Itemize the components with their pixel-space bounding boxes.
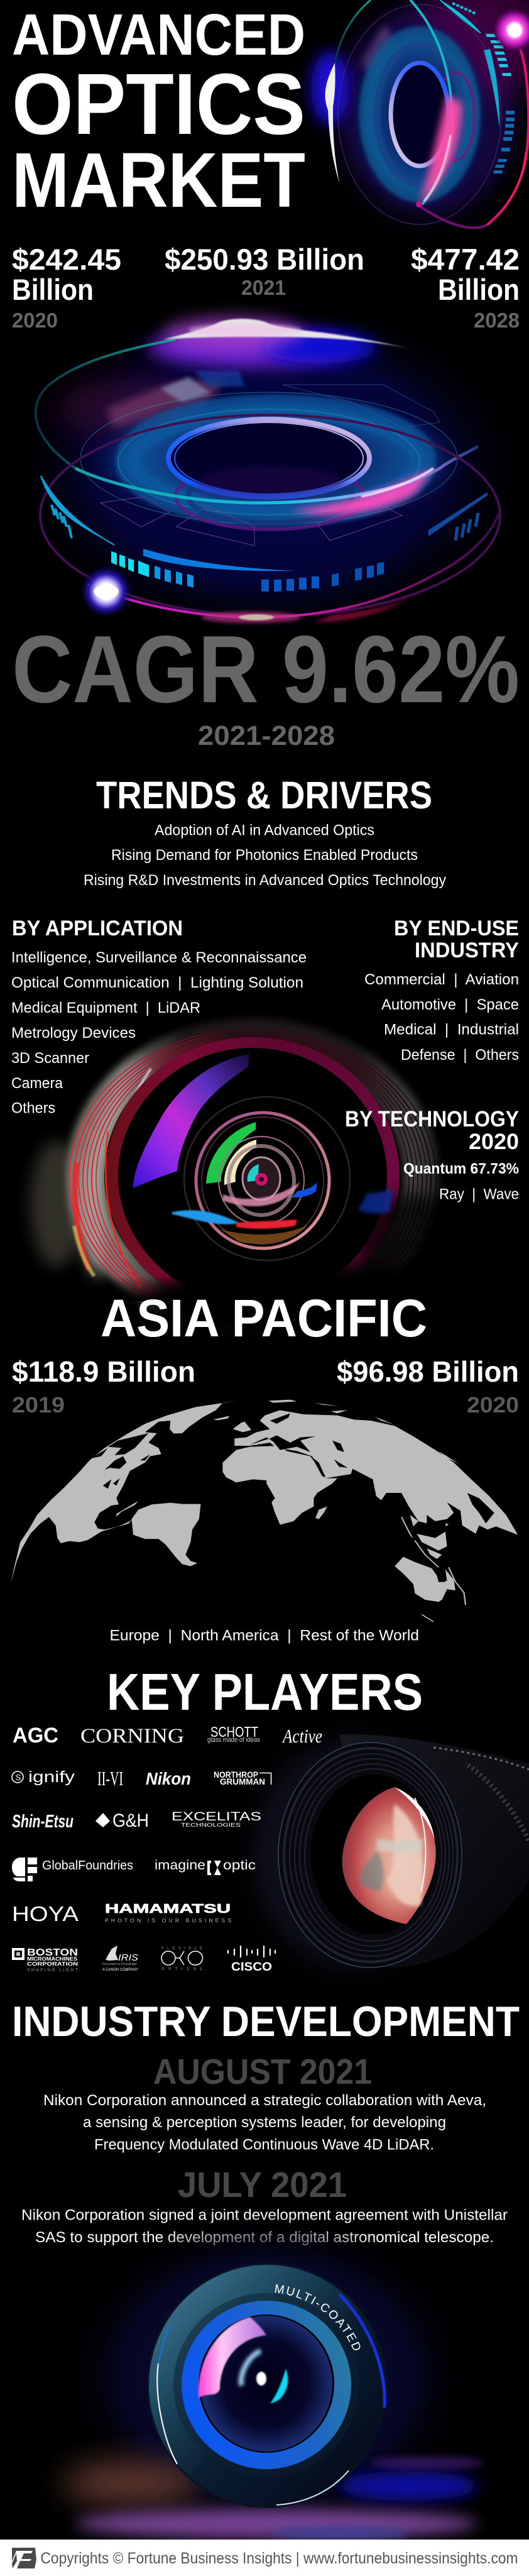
logo: Northrop Grumman <box>214 1770 271 1786</box>
asia pacific 2020 value: 2020 <box>467 1393 519 1417</box>
trends list: Rising Demand for Photonics Enabled Products <box>111 847 418 864</box>
title: ADVANCED <box>12 2 305 67</box>
panel: by end-use industry: Commercial | Aviation <box>364 971 519 988</box>
logo: Flexible OKO Optical: OPTICAL <box>161 1968 203 1971</box>
logo: IRIS: IRIS <box>118 1952 138 1963</box>
other regions: Europe | North America | Rest of the World <box>109 1627 419 1644</box>
logo: II-VI: II-VI <box>97 1767 123 1790</box>
trends list: Adoption of AI in Advanced Optics <box>155 822 374 839</box>
logo: Schott: SCHOTT <box>210 1724 258 1740</box>
logo: Excelitas: TECHNOLOGIES <box>181 1822 241 1828</box>
panel: by end-use industry <box>364 916 519 1064</box>
logo: Hoya: HOYA <box>12 1902 79 1925</box>
forecast period: 2021-2028 <box>198 720 335 751</box>
logo: Imagine Optic <box>155 1858 256 1875</box>
market size 2028: $477.42 <box>411 243 520 276</box>
logo: G&H <box>95 1810 149 1831</box>
logo: Signify: ignify <box>28 1768 75 1786</box>
icon: Fortune Business Insights logo <box>12 2548 36 2568</box>
market size 2020: $242.45 <box>12 243 121 276</box>
panel: by end-use industry: Automotive | Space <box>381 996 519 1013</box>
title: MARKET <box>12 138 305 224</box>
title: OPTICS <box>12 56 305 153</box>
logo: GlobalFoundries: GlobalFoundries <box>42 1859 133 1873</box>
logo: GlobalFoundries <box>12 1858 133 1881</box>
market size 2028 <box>411 243 520 332</box>
panel: by technology: Quantum 67.73% <box>403 1160 519 1177</box>
camera lens photograph <box>0 1029 529 1341</box>
development: august 2021: AUGUST 2021 <box>153 2052 372 2092</box>
asia pacific 2019 value <box>12 1355 195 1417</box>
logo: Northrop Grumman: NORTHROP <box>214 1770 258 1780</box>
panel: by technology: Ray | Wave <box>439 1186 519 1203</box>
logo: Cisco <box>228 1946 275 1974</box>
panel: by technology: 2020 <box>469 1130 519 1154</box>
logos <box>12 1724 322 1974</box>
development: august 2021 <box>43 2052 486 2154</box>
logo: Schott: glass made of ideas <box>207 1736 260 1744</box>
asia pacific 2020 value <box>337 1355 519 1417</box>
logo: Signify <box>12 1768 75 1786</box>
heading: key players: KEY PLAYERS <box>107 1663 423 1721</box>
development: august 2021: a sensing & perception systems leader, for developing <box>83 2114 446 2131</box>
logo: Boston Micromachines: CORPORATION <box>27 1961 78 1967</box>
camera lens photograph, multi-coated <box>51 2214 486 2540</box>
market size 2021: 2021 <box>241 276 286 299</box>
market size 2021 <box>165 243 364 299</box>
panel: by end-use industry: INDUSTRY <box>415 938 519 962</box>
logo: Boston Micromachines: SHAPING LIGHT <box>27 1968 79 1973</box>
logo: Imagine Optic: optic <box>223 1858 256 1873</box>
logo: Imagine Optic: imagine <box>155 1858 205 1873</box>
logo: Excelitas: EXCELITAS <box>172 1810 261 1824</box>
logo: Northrop Grumman: GRUMMAN <box>220 1776 265 1786</box>
logo: Hamamatsu: HAMAMATSU <box>105 1902 231 1916</box>
title <box>12 2 305 224</box>
development: july 2021: SAS to support the development of a digital astronomical telescope. <box>35 2229 494 2246</box>
panel: by application: Others <box>11 1100 55 1116</box>
panel: by end-use industry: Medical | Industrial <box>384 1021 519 1038</box>
logo: IRIS: A CANON COMPANY <box>102 1968 138 1972</box>
asia pacific 2019 value: 2019 <box>12 1393 65 1417</box>
trends list: Rising R&D Investments in Advanced Optics Technology <box>84 872 446 889</box>
camera lens photograph, dark <box>226 1710 529 1999</box>
panel: by application: Optical Communication | Lighting Solution <box>11 974 303 991</box>
hero illustration: futuristic lens, centre <box>3 292 529 644</box>
panel: by end-use industry: BY END-USE <box>394 916 519 940</box>
logo: Flexible OKO Optical <box>161 1947 203 1971</box>
panel: by application: BY APPLICATION <box>12 916 183 940</box>
logo: Boston Micromachines: BOSTON <box>27 1947 78 1958</box>
market size 2020: 2020 <box>12 309 58 332</box>
logo: G&H: G&H <box>112 1810 149 1831</box>
hero illustration: futuristic lens, top right <box>311 0 529 245</box>
logo: Nikon: Nikon <box>146 1769 191 1788</box>
panel: by application: Medical Equipment | LiDAR <box>11 999 200 1016</box>
footer: copyright bar <box>0 2540 529 2576</box>
logo: Boston Micromachines <box>12 1947 79 1973</box>
world map globe <box>11 1400 518 1622</box>
logo: Active: Active <box>281 1725 322 1747</box>
asia pacific 2020 value: $96.98 Billion <box>337 1355 519 1388</box>
heading: trends and drivers: TRENDS & DRIVERS <box>96 774 432 817</box>
market size 2028: 2028 <box>474 309 520 332</box>
logo: Excelitas <box>172 1810 261 1828</box>
logo: Hamamatsu: PHOTON IS OUR BUSINESS <box>105 1917 231 1924</box>
logo: Flexible OKO Optical: FLEXIBLE <box>161 1947 202 1951</box>
panel: by application: Camera <box>11 1075 63 1092</box>
development: august 2021: Frequency Modulated Continuous Wave 4D LiDAR. <box>94 2136 434 2154</box>
panel: by technology <box>345 1107 519 1203</box>
curved lens text: MULTI-COATED <box>275 2284 361 2350</box>
panel: by application: Intelligence, Surveillance & Reconnaissance <box>11 949 307 966</box>
market size 2028: Billion <box>438 273 520 306</box>
logo: Shin-Etsu: Shin-Etsu <box>12 1812 74 1832</box>
logo: Schott <box>207 1724 260 1744</box>
development: july 2021: JULY 2021 <box>178 2165 347 2205</box>
heading: asia pacific: ASIA PACIFIC <box>101 1289 427 1348</box>
logo: Cisco: CISCO <box>231 1961 272 1974</box>
development: july 2021 <box>21 2165 508 2246</box>
development: august 2021: Nikon Corporation announced a strategic collaboration with Aeva, <box>43 2092 486 2109</box>
panel: by application: Metrology Devices <box>11 1025 136 1042</box>
market size 2021: $250.93 Billion <box>165 243 364 276</box>
panel: by application: 3D Scanner <box>11 1050 89 1067</box>
logo: IRIS: Document to Knowledge <box>102 1962 137 1966</box>
logo: Corning: CORNING <box>80 1725 184 1748</box>
market size 2020 <box>12 243 121 332</box>
logo: Signify: S <box>15 1773 21 1782</box>
market size 2020: Billion <box>12 273 94 306</box>
development: july 2021: Nikon Corporation signed a joint development agreement with Unistellar <box>21 2206 508 2224</box>
panel: by end-use industry: Defense | Others <box>401 1047 519 1064</box>
logo: IRIS <box>102 1946 138 1972</box>
logo: Hamamatsu <box>105 1902 231 1924</box>
logo: Boston Micromachines: MICROMACHINES <box>27 1956 77 1962</box>
logo: AGC: AGC <box>13 1724 58 1748</box>
asia pacific 2019 value: $118.9 Billion <box>12 1355 195 1388</box>
trends list <box>84 822 446 889</box>
panel: by application <box>11 916 307 1116</box>
